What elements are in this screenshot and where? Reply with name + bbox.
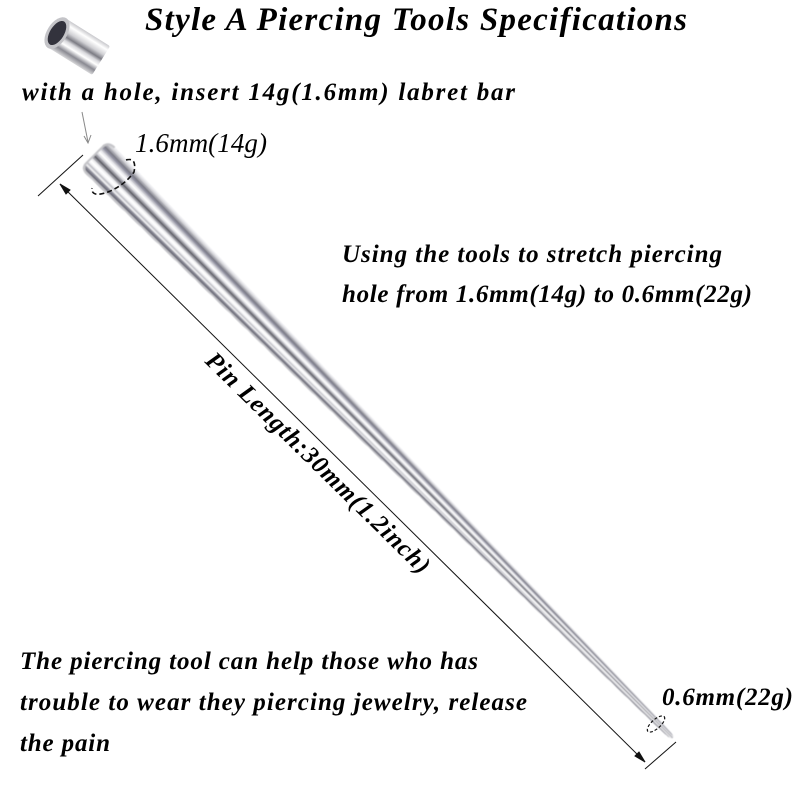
dashed ring: 0.6mm xyxy=(645,713,667,735)
text block: stretching note: hole from 1.6mm(14g) to 0.6mm(22g) xyxy=(342,281,752,308)
text block: usage note: The piercing tool can help those who has xyxy=(20,648,478,675)
dashed ring: 1.6mm xyxy=(92,160,135,194)
icon: labret end cap with hole xyxy=(39,13,110,75)
text block: usage note: trouble to wear they piercing jewelry, release xyxy=(20,689,527,716)
piercing pin xyxy=(80,140,690,755)
dimension line: pin length xyxy=(38,155,676,769)
label: pin length: Pin Length:30mm(1.2inch) xyxy=(199,346,436,579)
text block: stretching note xyxy=(342,241,752,308)
text block: usage note: the pain xyxy=(20,730,110,757)
caption: hole note: with a hole, insert 14g(1.6mm) labret bar xyxy=(22,79,515,106)
title: Style A Piercing Tools Specifications xyxy=(145,2,687,38)
text block: usage note xyxy=(20,648,527,757)
text block: stretching note: Using the tools to stretch piercing xyxy=(342,241,722,268)
label: head diameter: 1.6mm(14g) xyxy=(135,128,267,158)
label: tip diameter: 0.6mm(22g) xyxy=(662,684,793,711)
arrow: hole pointer xyxy=(82,112,91,143)
